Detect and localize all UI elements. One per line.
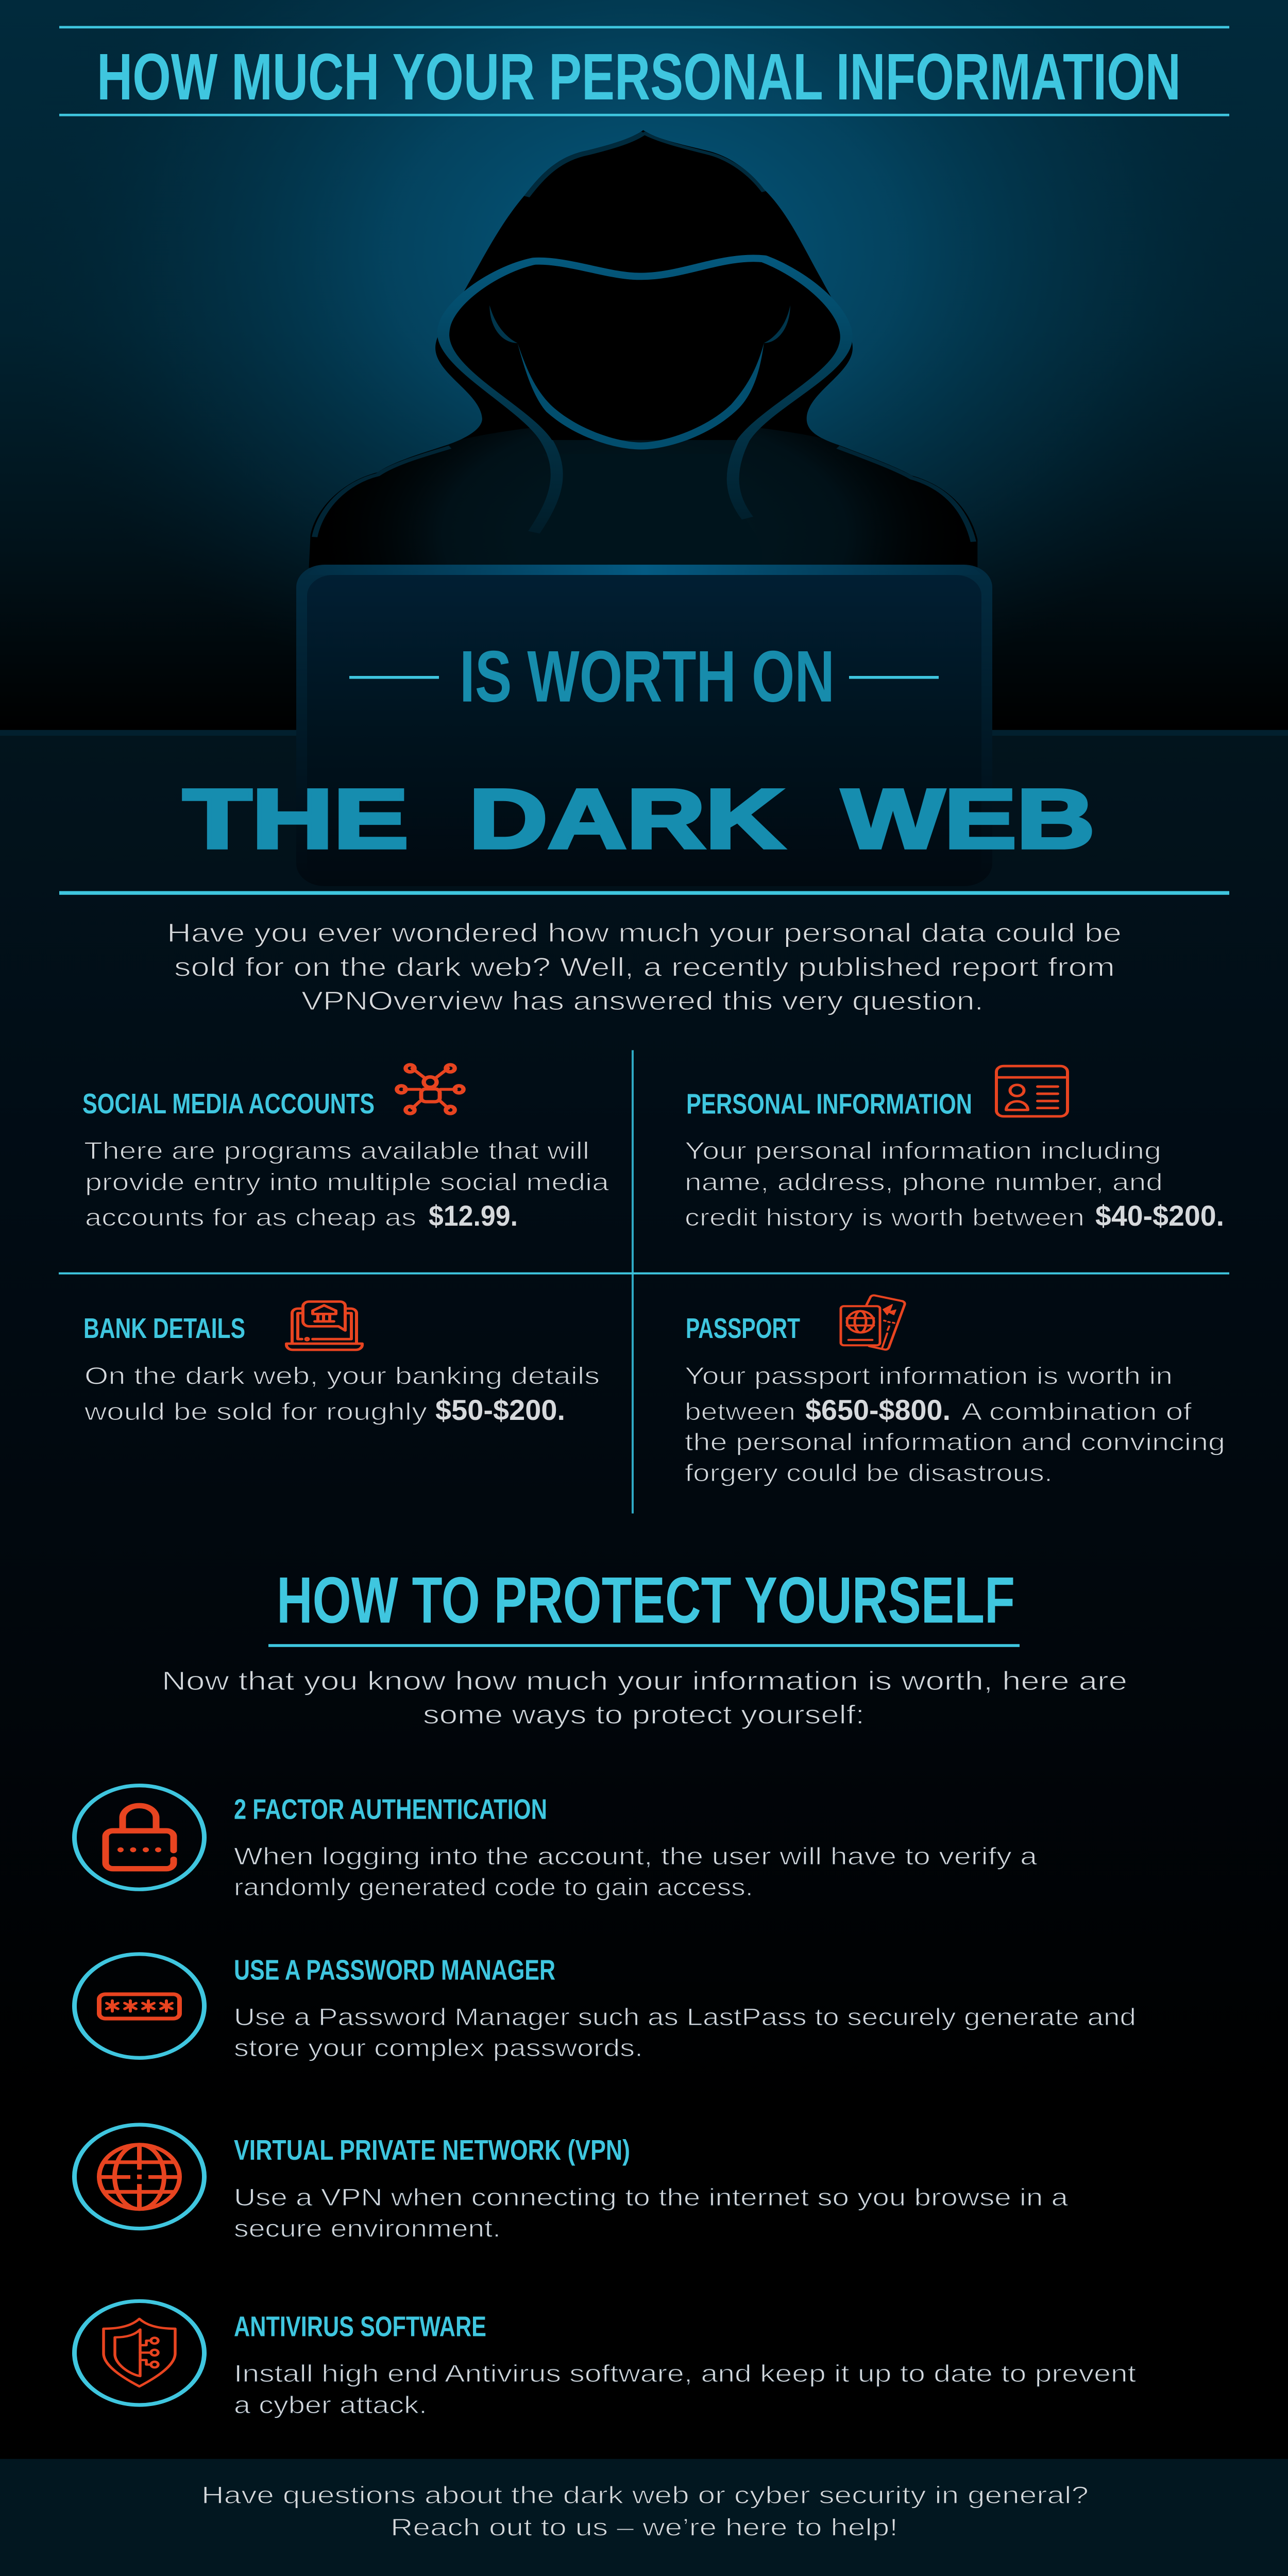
body text: randomly generated code to gain access.: [234, 1874, 753, 1901]
step: virtual private network: [74, 2125, 1068, 2242]
heading: ANTIVIRUS SOFTWARE: [234, 2311, 486, 2342]
body text: [685, 1362, 1225, 1487]
step: antivirus software: [74, 2301, 1136, 2418]
intro text: VPNOverview has answered this very question.: [301, 986, 984, 1015]
body text: accounts for as cheap as: [85, 1204, 416, 1231]
icon: password field in circle: [74, 1954, 204, 2058]
body text: [234, 2360, 1136, 2418]
background: lower dark panel: [0, 730, 1288, 2459]
protect intro text: [162, 1666, 1127, 1730]
panel: passport: [685, 1295, 1225, 1487]
body text: There are programs available that will: [84, 1137, 589, 1164]
body text: [685, 1137, 1224, 1232]
heading: 2 FACTOR AUTHENTICATION: [234, 1793, 547, 1825]
title rule thick: [59, 891, 1229, 895]
panel: bank details: [83, 1301, 600, 1426]
body text: $40-$200.: [1095, 1200, 1224, 1232]
icon: padlock in circle: [74, 1786, 204, 1889]
heading: USE A PASSWORD MANAGER: [234, 1954, 555, 1986]
body text: Use a Password Manager such as LastPass to securely generate and: [234, 2004, 1136, 2031]
intro text: Have you ever wondered how much your personal data could be: [167, 918, 1122, 947]
title: the dark web: [183, 772, 1095, 866]
heading: VIRTUAL PRIVATE NETWORK (VPN): [234, 2134, 630, 2166]
body text: A combination of: [961, 1398, 1192, 1425]
body text: [234, 1843, 1037, 1901]
body text: a cyber attack.: [234, 2392, 427, 2418]
grid dividers: [59, 1050, 1229, 1514]
illustration: hooded hacker: [309, 130, 978, 568]
panel: personal information: [685, 1066, 1224, 1232]
footer text: [201, 2482, 1089, 2541]
icon: passport and ticket: [841, 1295, 905, 1350]
icon: id card: [996, 1066, 1067, 1116]
body text: provide entry into multiple social media: [85, 1168, 609, 1196]
heading underline: [268, 1644, 1020, 1647]
body text: secure environment.: [234, 2215, 501, 2242]
intro text: [167, 918, 1122, 1015]
body text: between: [685, 1398, 795, 1425]
icon: globe in circle: [74, 2125, 204, 2229]
body text: [234, 2183, 1068, 2242]
panel: social media accounts: [82, 1065, 609, 1232]
subtitle: is worth on: [349, 636, 939, 717]
body text: Use a VPN when connecting to the internet so you browse in a: [234, 2183, 1068, 2211]
title: the dark web: DARK: [469, 772, 784, 866]
intro text: sold for on the dark web? Well, a recently published report from: [174, 952, 1115, 982]
title rule bottom: [59, 114, 1229, 116]
body text: $12.99.: [429, 1200, 518, 1232]
footer panel: [0, 2459, 1288, 2576]
body text: $50-$200.: [435, 1394, 565, 1426]
heading: social media accounts: SOCIAL MEDIA ACCOUNTS: [82, 1088, 375, 1120]
heading: personal information: PERSONAL INFORMATION: [686, 1088, 972, 1120]
step: 2 factor authentication: [74, 1786, 1037, 1901]
footer text: Reach out to us – we’re here to help!: [391, 2514, 898, 2541]
footer text: Have questions about the dark web or cyber security in general?: [201, 2482, 1089, 2509]
subtitle: is worth on: IS WORTH ON: [460, 636, 835, 717]
title rule top: [59, 26, 1229, 28]
body text: [84, 1137, 609, 1232]
icon: social network: [397, 1065, 464, 1113]
title: the dark web: WEB: [842, 772, 1095, 866]
icon: online banking laptop: [286, 1301, 362, 1350]
body text: Install high end Antivirus software, and keep it up to date to prevent: [234, 2360, 1136, 2387]
step: use a password manager: [74, 1954, 1136, 2062]
body text: [234, 2004, 1136, 2062]
body text: name, address, phone number, and: [685, 1168, 1163, 1196]
background: top glow panel: [0, 0, 1288, 736]
illustration: laptop: [296, 565, 992, 886]
body text: forgery could be disastrous.: [685, 1460, 1053, 1487]
title: the dark web: THE: [183, 772, 409, 866]
body text: store your complex passwords.: [234, 2035, 643, 2062]
protect intro text: some ways to protect yourself:: [423, 1700, 865, 1730]
body text: When logging into the account, the user will have to verify a: [234, 1843, 1037, 1870]
body text: Your passport information is worth in: [685, 1362, 1173, 1389]
icon: shield in circle: [74, 2301, 204, 2405]
body text: $650-$800.: [805, 1394, 951, 1426]
body text: On the dark web, your banking details: [84, 1362, 600, 1389]
protect intro text: Now that you know how much your information is worth, here are: [162, 1666, 1127, 1696]
body text: [84, 1362, 600, 1426]
body text: the personal information and convincing: [685, 1429, 1225, 1456]
body text: credit history is worth between: [685, 1204, 1084, 1231]
body text: Your personal information including: [685, 1137, 1161, 1164]
heading: bank details: BANK DETAILS: [83, 1312, 245, 1344]
heading: passport: PASSPORT: [686, 1312, 800, 1344]
body text: would be sold for roughly: [84, 1398, 427, 1425]
